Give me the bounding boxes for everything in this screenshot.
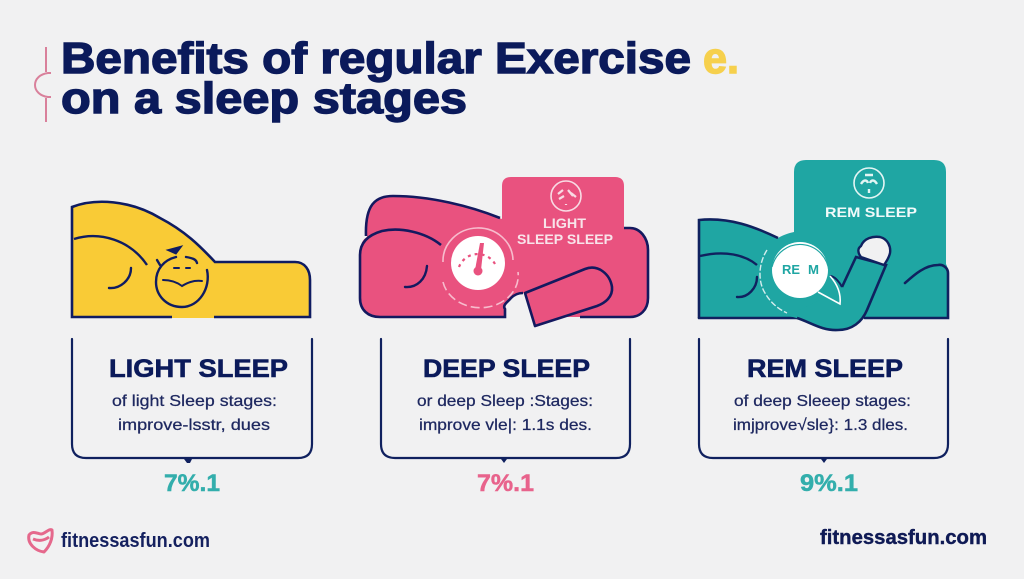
card: deep sleep: [381, 339, 630, 463]
title ornament: [35, 47, 51, 122]
rem panel label: REM SLEEP: [825, 204, 917, 220]
brand text right: fitnessasfun.com: [820, 527, 987, 549]
rem sleep arm: [787, 257, 886, 330]
deep sleep panel label: [517, 215, 613, 247]
brand text left: fitnessasfun.com: [61, 530, 210, 552]
rem sleep hand: [858, 237, 890, 265]
illustration: light sleep: [72, 202, 310, 318]
description: deep sleep: improve vle|: 1.1s des.: [419, 417, 592, 434]
illustration: deep sleep: [360, 177, 648, 326]
description: deep sleep: [417, 393, 593, 434]
description: rem sleep: [733, 393, 911, 434]
stat: deep sleep: 7%.1: [477, 470, 534, 497]
icon: gauge: [443, 228, 518, 308]
icon: small panel dial: [551, 181, 581, 211]
card: rem sleep: [699, 339, 948, 463]
illustration: rem sleep: [699, 160, 948, 330]
rem circle badge: [760, 242, 842, 313]
title: on a sleep stages: [61, 74, 467, 123]
description: light sleep: [112, 393, 277, 434]
icon: rem panel dial: [854, 168, 884, 198]
heading: light sleep: LIGHT SLEEP: [109, 355, 288, 383]
title: [61, 34, 739, 123]
deep sleep panel label: LIGHT: [543, 215, 586, 231]
stat: rem sleep: 9%.1: [800, 470, 858, 497]
title: Benefits of regular Exercise: [61, 34, 691, 83]
stat: light sleep: 7%.1: [164, 470, 220, 497]
heading: deep sleep: DEEP SLEEP: [423, 355, 590, 383]
deep sleep panel label: SLEEP SLEEP: [517, 231, 613, 247]
logo: heart icon: [29, 530, 52, 552]
deep sleep arm: [525, 268, 612, 326]
title: e.: [703, 34, 739, 83]
rem circle badge: RE: [782, 262, 800, 277]
heading: rem sleep: REM SLEEP: [747, 355, 903, 383]
description: rem sleep: imjprove√sle}: 1.3 dles.: [733, 417, 908, 434]
description: rem sleep: of deep Sleeep stages:: [734, 393, 911, 410]
icon: sleeping face: [156, 246, 208, 307]
description: deep sleep: or deep Sleep :Stages:: [417, 393, 593, 410]
rem circle badge: M: [808, 262, 819, 277]
card: light sleep: [72, 339, 312, 463]
description: light sleep: of light Sleep stages:: [112, 393, 277, 410]
description: light sleep: improve-lsstr, dues: [118, 417, 270, 434]
